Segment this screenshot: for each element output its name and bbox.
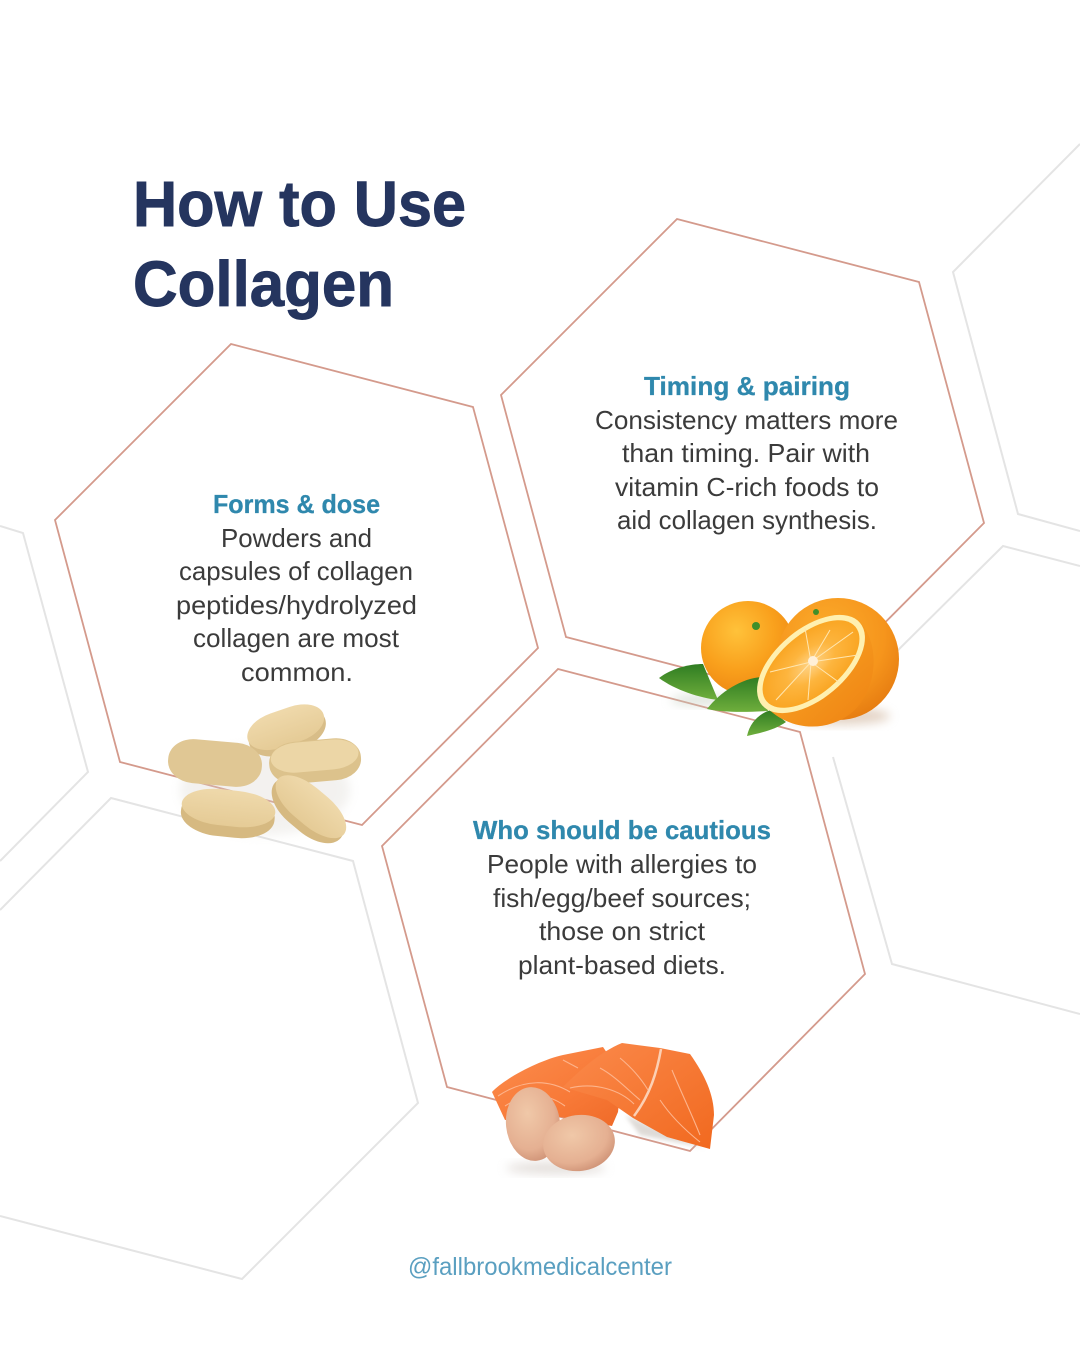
text block: forms and dose: Forms & dose xyxy=(213,489,380,519)
panel: timing and pairing hexagon xyxy=(501,219,984,700)
text block: timing and pairing: Timing & pairing xyxy=(644,371,850,401)
text block: forms and dose: common. xyxy=(241,657,353,687)
tablet bottom left xyxy=(179,785,277,842)
text block: timing and pairing: vitamin C-rich foods to xyxy=(615,472,879,502)
title: Collagen xyxy=(133,248,394,320)
panel: who should be cautious hexagon xyxy=(382,669,865,1151)
text block: timing and pairing xyxy=(595,371,898,535)
text block: forms and dose: Powders and xyxy=(221,523,372,553)
text block: forms and dose: peptides/hydrolyzed xyxy=(176,590,417,620)
text block: timing and pairing: than timing. Pair with xyxy=(622,438,870,468)
text block: who should be cautious: those on strict xyxy=(539,916,706,946)
text block: timing and pairing: Consistency matters more xyxy=(595,405,898,435)
text block: forms and dose xyxy=(176,489,417,687)
text block: who should be cautious xyxy=(473,815,771,980)
panel: forms and dose hexagon xyxy=(55,344,538,825)
icon: oranges with leaves xyxy=(659,596,899,736)
social handle: @fallbrookmedicalcenter xyxy=(408,1253,672,1281)
text block: who should be cautious: fish/egg/beef sources; xyxy=(493,883,751,913)
text block: forms and dose: capsules of collagen xyxy=(179,556,413,586)
text block: who should be cautious: plant-based diets. xyxy=(518,950,726,980)
text block: who should be cautious: People with allergies to xyxy=(487,849,757,879)
tablet left xyxy=(166,737,264,789)
text block: forms and dose: collagen are most xyxy=(193,623,400,653)
title xyxy=(133,168,466,320)
tablet top xyxy=(242,697,332,764)
text block: timing and pairing: aid collagen synthesis. xyxy=(617,505,877,535)
icon: salmon fillets and eggs xyxy=(492,1043,714,1176)
tablet right xyxy=(267,736,363,786)
tablet bottom right xyxy=(261,765,355,854)
text block: who should be cautious: Who should be cautious xyxy=(473,815,771,845)
title: How to Use xyxy=(133,168,466,240)
icon: beige tablets xyxy=(166,697,363,854)
